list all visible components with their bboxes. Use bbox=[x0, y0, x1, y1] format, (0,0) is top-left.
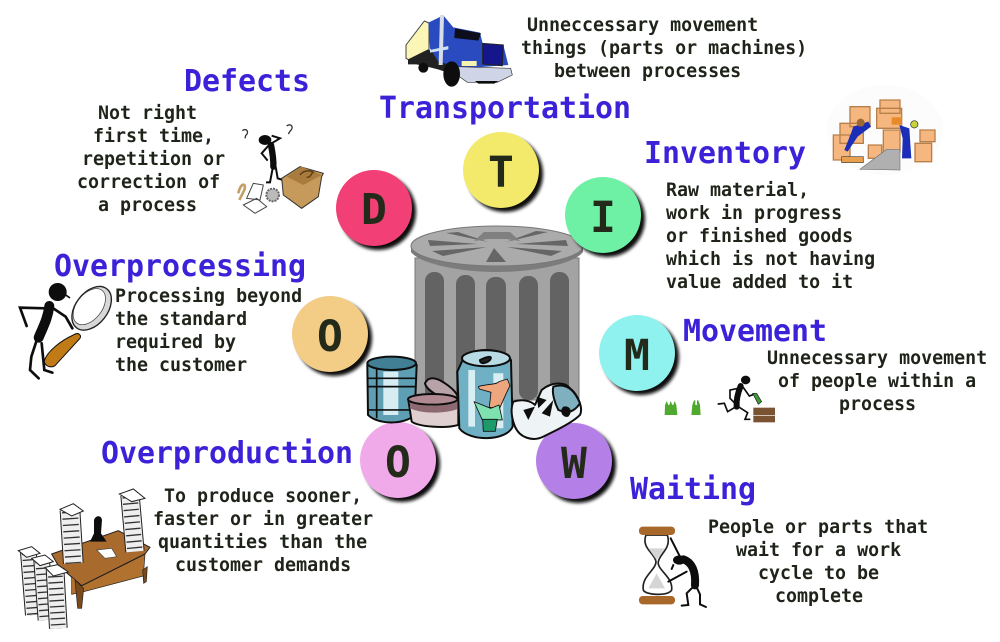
text: defects description: Not right bbox=[98, 103, 197, 124]
icon: confused figure with box bbox=[238, 125, 323, 213]
text: overproduction description: faster or in greater bbox=[153, 509, 373, 530]
heading: Defects: Defects bbox=[184, 64, 310, 99]
circle: O overprocessing: O bbox=[317, 312, 343, 362]
panel: movement bbox=[665, 314, 987, 422]
text: inventory description: or finished goods bbox=[666, 226, 853, 247]
text: waiting description bbox=[708, 517, 928, 607]
text: transportation description bbox=[521, 15, 807, 82]
circle: T: T bbox=[488, 148, 514, 198]
text: defects description: first time, bbox=[93, 126, 214, 147]
text: waiting description: People or parts that bbox=[708, 517, 928, 538]
icon: figure carrying bottle bbox=[665, 376, 775, 422]
text: waiting description: wait for a work bbox=[736, 540, 901, 561]
text: inventory description: which is not having bbox=[666, 249, 875, 270]
heading: Overprocessing: Overprocessing bbox=[54, 249, 306, 284]
icon: truck bbox=[406, 15, 512, 87]
text: defects description bbox=[77, 103, 225, 216]
text: overproduction description bbox=[153, 486, 373, 576]
icon: workers and boxes bbox=[827, 85, 943, 175]
panel: transportation bbox=[379, 15, 807, 126]
illustration: cans and rubbish bbox=[367, 350, 581, 439]
circle: W bbox=[536, 423, 616, 503]
icon: hourglass with figure bbox=[639, 527, 706, 607]
text: transportation description: between processes bbox=[554, 61, 741, 82]
circle: D: D bbox=[361, 185, 387, 235]
text: movement description bbox=[767, 348, 987, 415]
panel: inventory bbox=[644, 85, 943, 293]
circle: O overproduction bbox=[360, 422, 440, 502]
heading: Movement: Movement bbox=[683, 314, 827, 349]
heading: Inventory: Inventory bbox=[644, 136, 806, 171]
circle: O overprocessing bbox=[292, 296, 372, 376]
text: overproduction description: quantities than the bbox=[158, 532, 367, 553]
text: overprocessing description: required by bbox=[115, 332, 236, 353]
panel: overproduction bbox=[18, 436, 373, 628]
circle: I: I bbox=[590, 193, 616, 243]
heading: Overproduction: Overproduction bbox=[101, 436, 353, 471]
circle: M: M bbox=[624, 331, 650, 381]
circle: W: W bbox=[561, 439, 587, 489]
text: overprocessing description bbox=[115, 286, 302, 376]
text: defects description: repetition or bbox=[82, 149, 225, 170]
text: defects description: correction of bbox=[77, 172, 220, 193]
text: waiting description: cycle to be bbox=[758, 563, 879, 584]
text: overproduction description: To produce sooner, bbox=[164, 486, 362, 507]
text: transportation description: things (parts or machines) bbox=[521, 38, 807, 59]
panel: defects bbox=[77, 64, 323, 216]
text: movement description: process bbox=[839, 394, 916, 415]
circle: M bbox=[599, 315, 679, 395]
text: defects description: a process bbox=[98, 195, 197, 216]
icon: figure with magnifying glass bbox=[20, 279, 119, 378]
icon: desk with paper stacks bbox=[18, 489, 150, 628]
circle: T bbox=[463, 132, 543, 212]
text: inventory description bbox=[666, 180, 875, 293]
circle: D bbox=[336, 170, 416, 250]
illustration: trash can bbox=[411, 226, 583, 400]
text: inventory description: work in progress bbox=[666, 203, 842, 224]
heading: Transportation: Transportation bbox=[379, 91, 631, 126]
heading: Waiting: Waiting bbox=[630, 472, 756, 507]
text: movement description: of people within a bbox=[778, 371, 976, 392]
text: waiting description: complete bbox=[775, 586, 863, 607]
panel: waiting bbox=[630, 472, 928, 607]
text: movement description: Unnecessary movement bbox=[767, 348, 987, 369]
text: inventory description: value added to it bbox=[666, 272, 853, 293]
text: overprocessing description: the customer bbox=[115, 355, 247, 376]
text: overproduction description: customer demands bbox=[175, 555, 351, 576]
circle: O overproduction: O bbox=[385, 438, 411, 488]
text: inventory description: Raw material, bbox=[666, 180, 809, 201]
text: overprocessing description: the standard bbox=[115, 309, 247, 330]
text: transportation description: Unneccessary movement bbox=[527, 15, 758, 36]
circle: I bbox=[565, 177, 645, 257]
text: overprocessing description: Processing beyond bbox=[115, 286, 302, 307]
panel: overprocessing bbox=[20, 249, 306, 378]
